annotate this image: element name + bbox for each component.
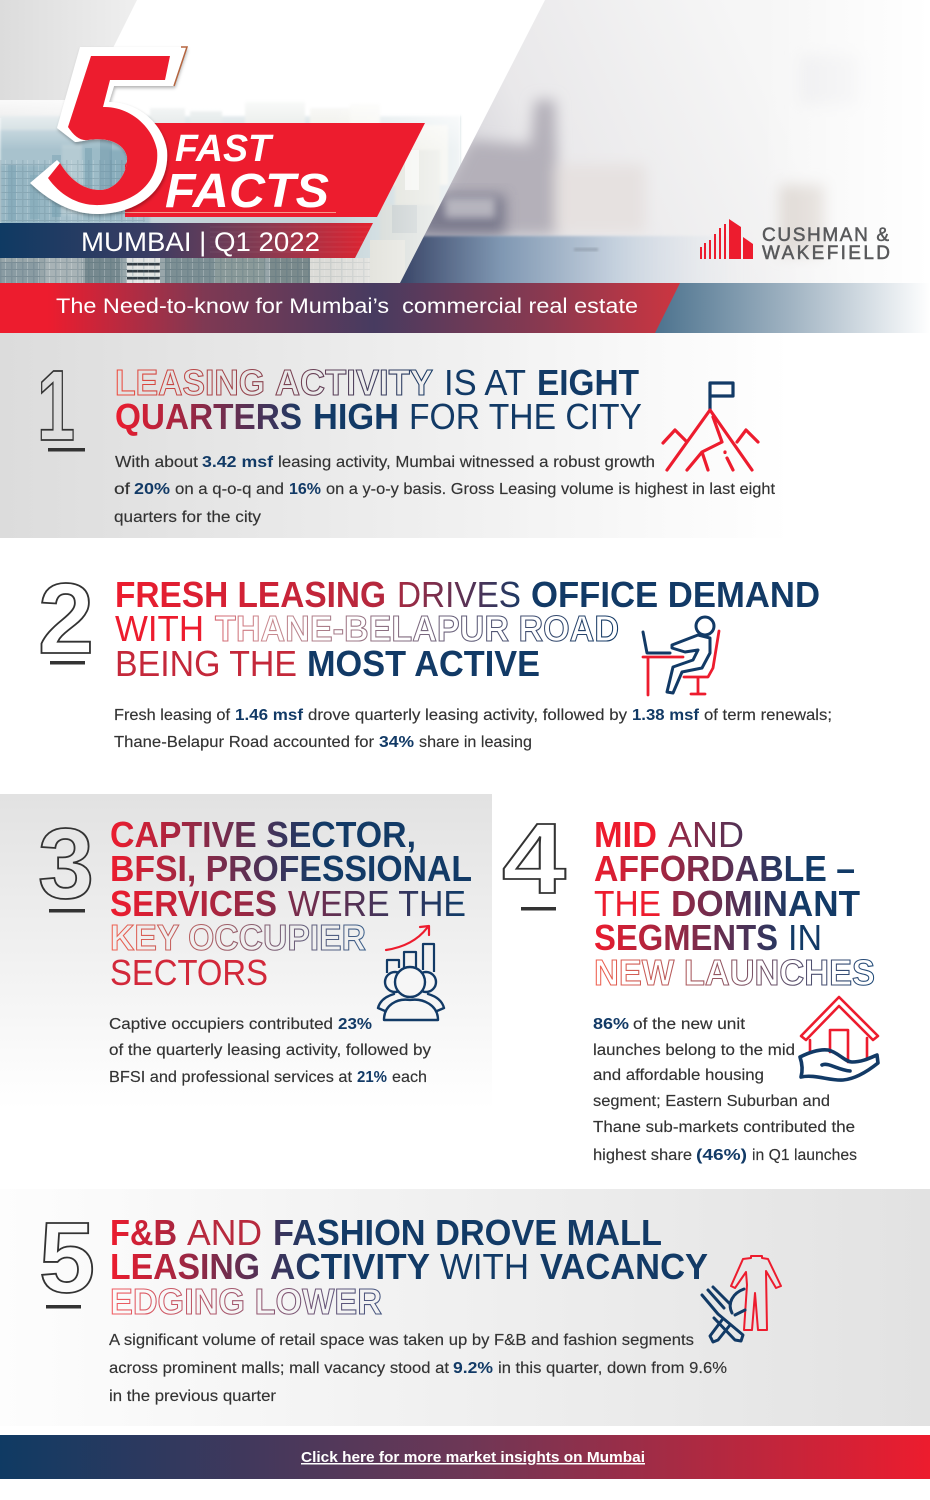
- body text 2: Fresh leasing of: [114, 707, 231, 724]
- heading 1: EIGHT: [537, 362, 639, 403]
- logo wordmark: CUSHMAN &: [762, 225, 889, 246]
- icon: mountain flag: [663, 383, 758, 470]
- body text 1: quarters for the city: [114, 509, 261, 526]
- body text 2: 34%: [379, 734, 414, 751]
- heading 2: OFFICE DEMAND: [531, 574, 820, 615]
- body text 2: share in leasing: [419, 734, 532, 751]
- heading 2: WITH: [115, 608, 204, 649]
- body text 1: 20%: [134, 481, 170, 498]
- hazy right photo panel: [400, 0, 852, 283]
- body text 3: each: [392, 1069, 427, 1086]
- heading 5: LEASING: [110, 1246, 260, 1287]
- heading 5: VACANCY: [540, 1246, 708, 1287]
- body text 4: launches belong to the mid: [593, 1042, 795, 1059]
- heading 2: DRIVES: [397, 574, 521, 615]
- body text 1: 16%: [289, 481, 321, 498]
- tagline band: [0, 283, 930, 333]
- heading 1: HIGH: [313, 396, 399, 437]
- footer link: Click here for more market insights on Mumbai: [301, 1449, 645, 1466]
- heading 5: FASHION DROVE MALL: [273, 1212, 662, 1253]
- body text 5: in this quarter, down from 9.6%: [498, 1360, 727, 1377]
- body text 1: With about: [115, 454, 199, 471]
- body text 2: 1.46 msf: [235, 707, 304, 724]
- body text 2: Thane-Belapur Road accounted for: [114, 734, 375, 751]
- body text 2: drove quarterly leasing activity, followed by: [308, 707, 627, 724]
- heading 3: SERVICES: [110, 883, 277, 924]
- numeral 4: 4: [502, 803, 566, 915]
- heading 4: THE: [594, 883, 661, 924]
- heading 5: EDGING LOWER: [110, 1281, 382, 1322]
- body text 4: (46%): [696, 1147, 747, 1164]
- body text 4: [593, 1016, 857, 1164]
- body text 5: A significant volume of retail space was taken up by F&B and fashion segments: [109, 1332, 694, 1349]
- heading 4: AFFORDABLE –: [594, 848, 855, 889]
- heading 1: FOR THE CITY: [409, 396, 642, 437]
- numeral 1: 1: [37, 350, 75, 462]
- icon: person at desk: [643, 617, 719, 695]
- city skyline photo: [0, 0, 460, 283]
- icon: fork and jumpsuit: [702, 1256, 781, 1342]
- numeral 5: 5: [39, 1202, 95, 1314]
- body text 4: 86%: [593, 1016, 629, 1033]
- icon: people with growth chart: [378, 926, 444, 1020]
- heading 4: NEW LAUNCHES: [594, 952, 875, 993]
- tagline text: The Need-to-know for Mumbai’s commercial real estate: [56, 295, 638, 318]
- body text 3: [109, 1016, 431, 1086]
- banner: navy date ribbon: [0, 223, 373, 258]
- body text 4: highest share: [593, 1147, 692, 1164]
- logo: Cushman & Wakefield: [700, 219, 890, 264]
- panel: fact 3: [0, 794, 492, 1165]
- body text 5: in the previous quarter: [109, 1388, 277, 1405]
- header photo background: [0, 0, 852, 283]
- body text 1: [114, 454, 776, 526]
- body text 5: 9.2%: [453, 1360, 493, 1377]
- title: FAST FACTS: FAST: [175, 128, 274, 170]
- heading 5: WITH: [440, 1246, 529, 1287]
- heading 4: AND: [668, 814, 744, 855]
- subtitle: Mumbai Q1 2022: MUMBAI | Q1 2022: [81, 227, 320, 257]
- body text 3: Captive occupiers contributed: [109, 1016, 333, 1033]
- body text 4: and affordable housing: [593, 1067, 764, 1084]
- panel: fact 5: [0, 1189, 930, 1426]
- heading 5: [110, 1212, 708, 1322]
- heading 3: CAPTIVE SECTOR,: [110, 814, 416, 855]
- logo wordmark: WAKEFIELD: [762, 243, 890, 264]
- logo wordmark: [762, 225, 890, 264]
- body text 4: segment; Eastern Suburban and: [593, 1093, 830, 1110]
- heading 2: THANE-BELAPUR ROAD: [215, 608, 619, 649]
- heading 1: [115, 362, 642, 437]
- body text 1: of: [114, 481, 131, 498]
- numeral 3: 3: [38, 808, 94, 920]
- heading 4: IN: [788, 917, 822, 958]
- body text 3: of the quarterly leasing activity, followed by: [109, 1042, 431, 1059]
- body text 1: leasing activity, Mumbai witnessed a robust growth: [278, 454, 655, 471]
- heading 1: LEASING: [115, 362, 265, 403]
- heading 5: F&B: [110, 1212, 177, 1253]
- body text 3: 21%: [357, 1069, 387, 1086]
- body text 5: [109, 1332, 727, 1405]
- heading 3: BFSI, PROFESSIONAL: [110, 848, 472, 889]
- title: FAST FACTS: [165, 128, 329, 218]
- body text 4: in Q1 launches: [752, 1147, 857, 1164]
- logo mark: [700, 219, 753, 259]
- heading 3: [110, 814, 472, 993]
- body text 2: 1.38 msf: [632, 707, 700, 724]
- body text 1: 3.42 msf: [202, 454, 274, 471]
- panel: fact 4: [502, 803, 878, 1164]
- big numeral 5 logo: [30, 47, 187, 214]
- icon: house in hand: [800, 997, 878, 1080]
- heading 4: DOMINANT: [671, 883, 860, 924]
- body text 3: BFSI and professional services at: [109, 1069, 353, 1086]
- heading 2: MOST ACTIVE: [307, 643, 540, 684]
- body text 2: [114, 707, 832, 751]
- body text 1: on a q-o-q and: [175, 481, 284, 498]
- heading 2: FRESH LEASING: [115, 574, 386, 615]
- heading 1: IS AT: [444, 362, 526, 403]
- heading 4: MID: [594, 814, 657, 855]
- heading 3: SECTORS: [110, 952, 268, 993]
- heading 5: ACTIVITY: [270, 1246, 430, 1287]
- body text 4: of the new unit: [633, 1016, 746, 1033]
- panel: fact 2: [0, 538, 930, 794]
- heading 3: KEY OCCUPIER: [110, 917, 366, 958]
- body text 1: on a y-o-y basis. Gross Leasing volume is highest in last eight: [326, 481, 776, 498]
- heading 2: [115, 574, 820, 684]
- footer band: [0, 1435, 930, 1479]
- heading 3: WERE THE: [288, 883, 466, 924]
- body text 2: of term renewals;: [704, 707, 832, 724]
- body text 5: across prominent malls; mall vacancy stood at: [109, 1360, 450, 1377]
- heading 5: AND: [187, 1212, 262, 1253]
- heading 1: ACTIVITY: [275, 362, 433, 403]
- body text 4: Thane sub-markets contributed the: [593, 1119, 855, 1136]
- numeral 2: 2: [38, 563, 94, 675]
- heading 4: SEGMENTS: [594, 917, 778, 958]
- heading 4: [594, 814, 875, 993]
- heading 1: QUARTERS: [115, 396, 302, 437]
- panel: fact 1: [0, 333, 930, 538]
- heading 2: BEING THE: [115, 643, 297, 684]
- body text 3: 23%: [338, 1016, 372, 1033]
- title: FAST FACTS: FACTS: [165, 165, 329, 218]
- banner: red FAST FACTS ribbon: [125, 123, 425, 217]
